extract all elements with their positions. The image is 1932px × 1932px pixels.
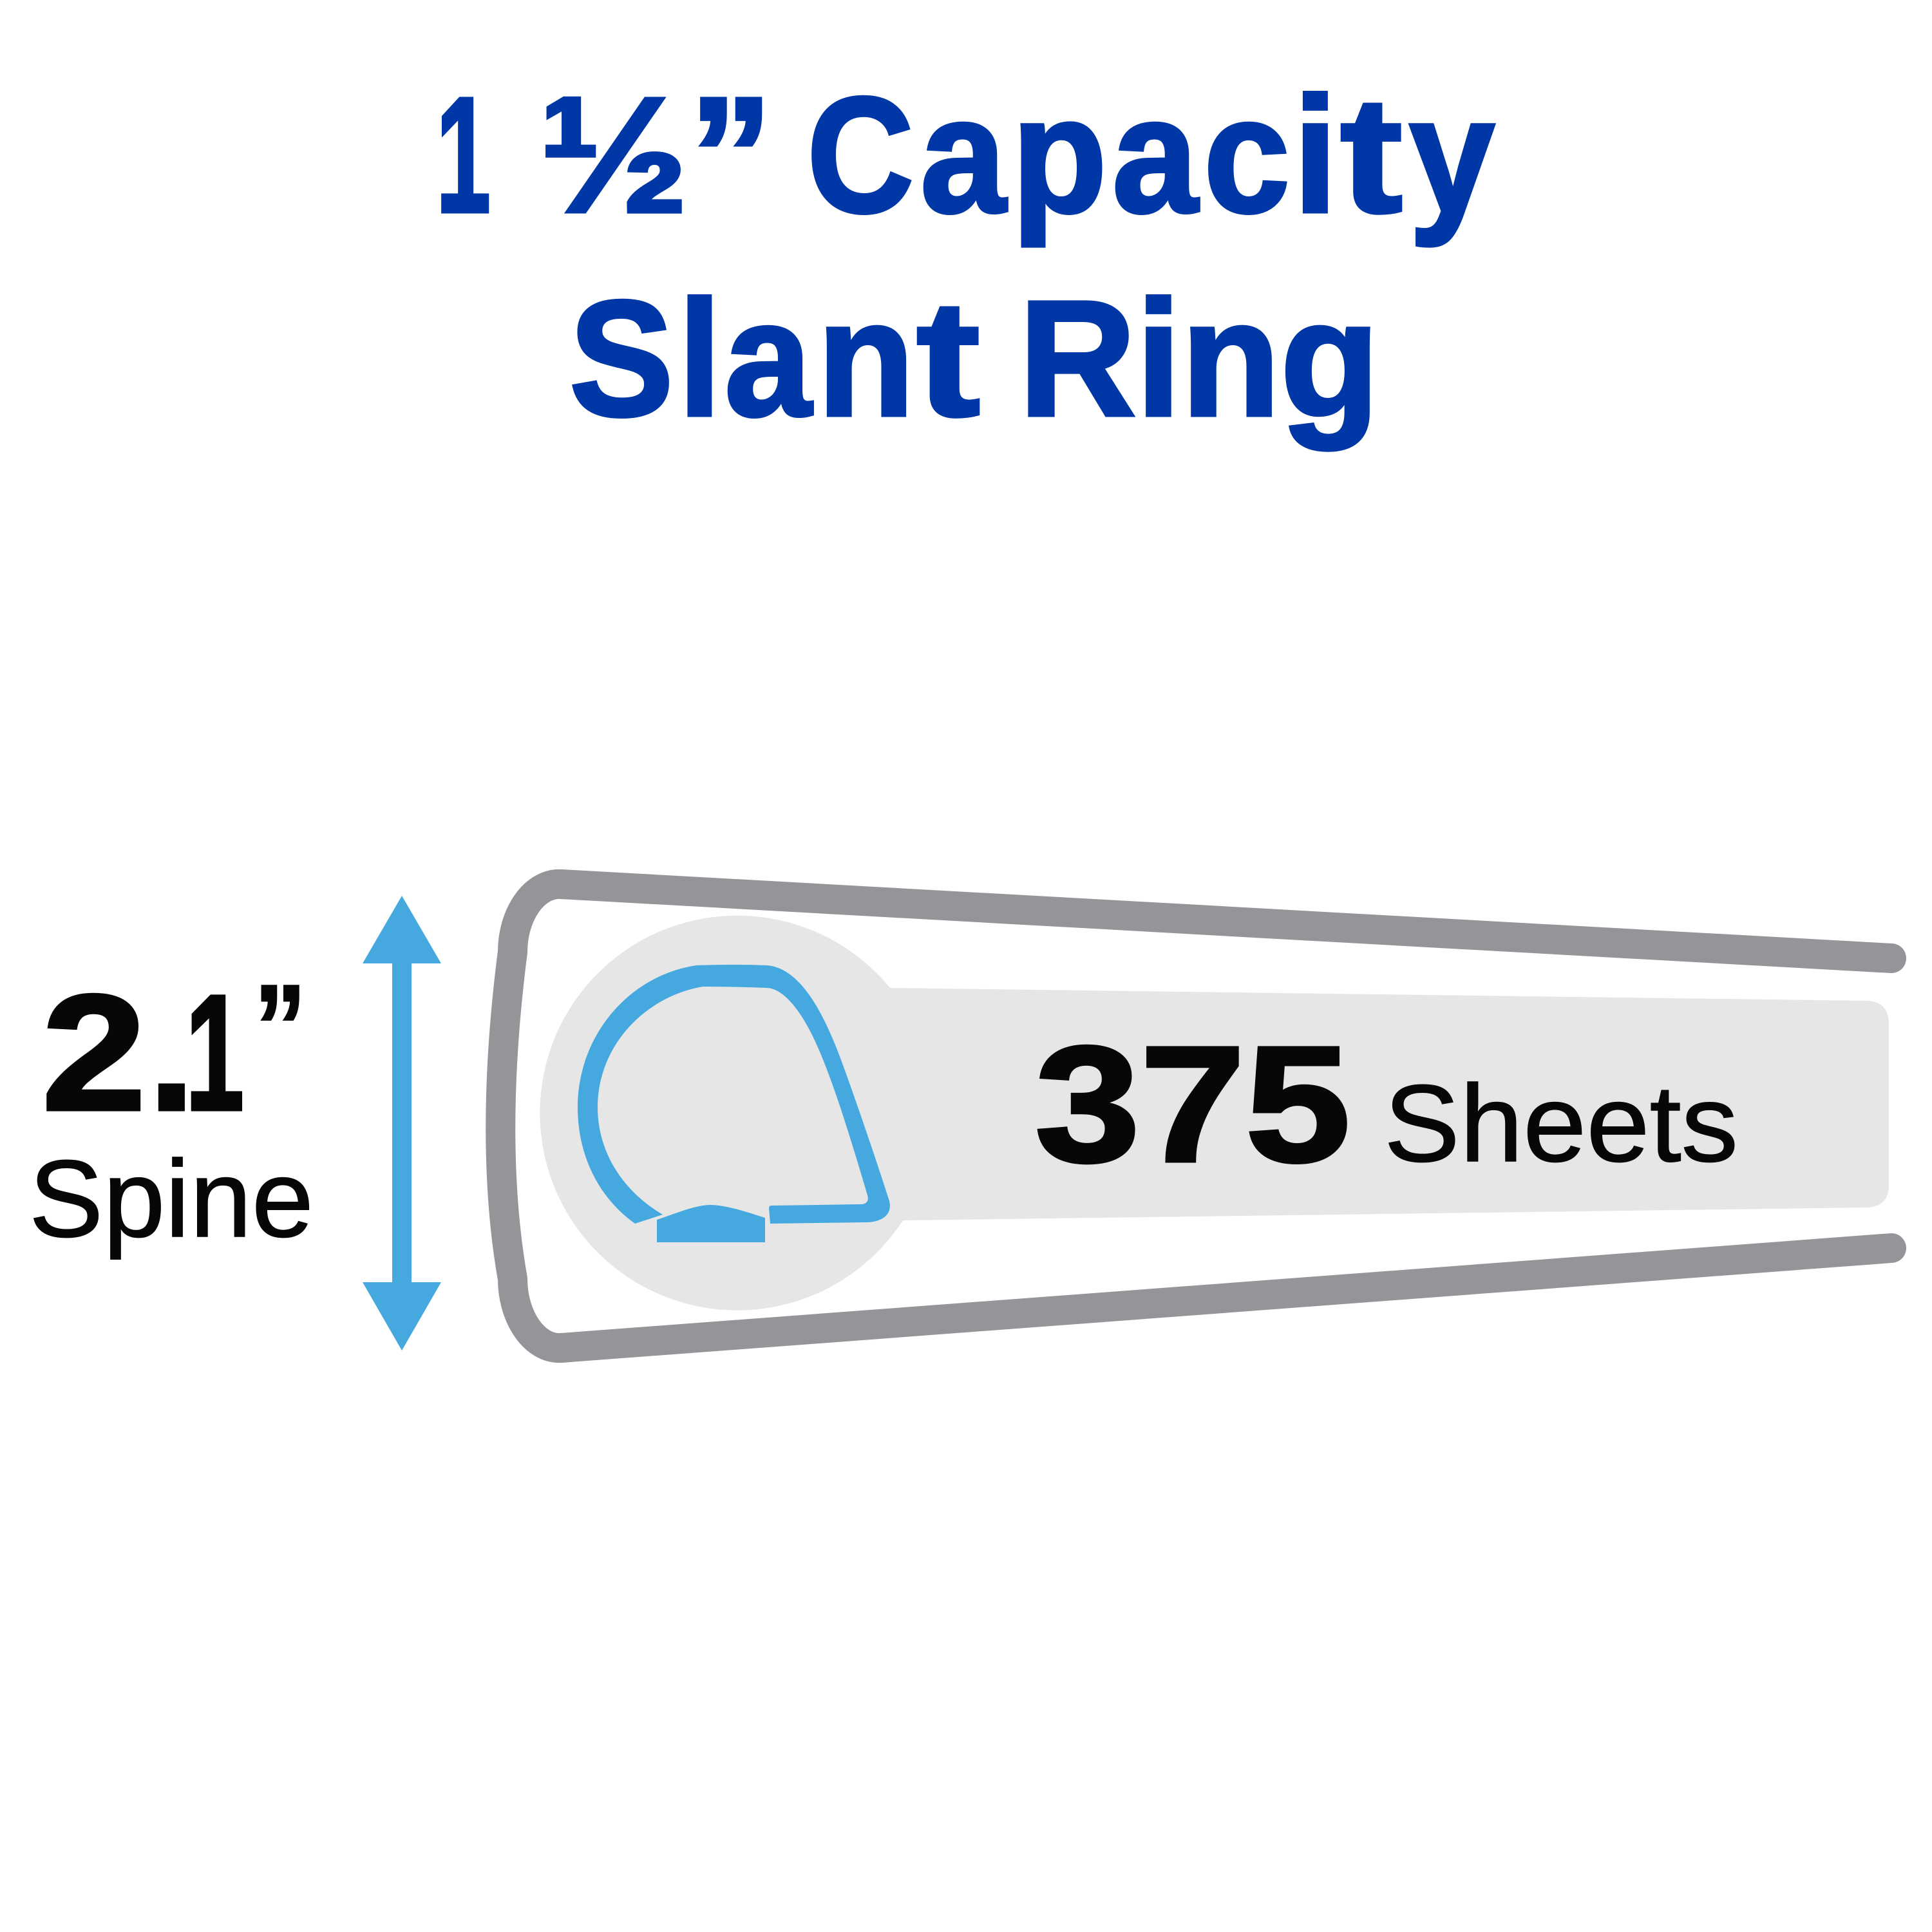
title line 1: p xyxy=(1012,63,1107,247)
spine label: Spine xyxy=(29,1138,314,1260)
title line 2: n xyxy=(817,267,914,451)
title line 2: S xyxy=(569,267,674,451)
title line 1: c xyxy=(1204,63,1290,247)
title line 1: t xyxy=(1340,63,1403,247)
title line 1: i xyxy=(1293,63,1338,247)
double-headed arrow xyxy=(363,896,441,1350)
title line 2: a xyxy=(724,267,813,451)
capacity value: 375 xyxy=(1035,1012,1350,1197)
spine measurement label xyxy=(29,960,314,1260)
capacity value: Sheets xyxy=(1384,1063,1738,1185)
binder outline xyxy=(500,884,1891,1348)
title line 1: ” xyxy=(689,63,773,247)
badge background xyxy=(540,916,1889,1311)
spine value: 1 xyxy=(185,961,244,1145)
title line 1: ½ xyxy=(539,63,688,247)
capacity badge xyxy=(540,916,1889,1311)
capacity value xyxy=(1035,1012,1738,1197)
title xyxy=(436,63,1495,451)
title line 2 xyxy=(569,267,1379,451)
title line 1: 1 xyxy=(436,63,491,247)
title line 1: a xyxy=(920,63,1007,247)
title line 1: a xyxy=(1112,63,1199,247)
spine value: 2 xyxy=(42,961,146,1145)
title line 1 xyxy=(436,63,1495,247)
icon: slant ring xyxy=(578,965,890,1242)
title line 2: t xyxy=(916,267,980,451)
title line 1: y xyxy=(1409,63,1495,247)
title line 2: l xyxy=(678,267,721,451)
title line 2: Ring xyxy=(1019,267,1379,451)
spine value: ” xyxy=(254,960,307,1096)
spine value: . xyxy=(149,961,194,1145)
title line 1: C xyxy=(807,63,914,247)
spine value xyxy=(42,960,307,1145)
